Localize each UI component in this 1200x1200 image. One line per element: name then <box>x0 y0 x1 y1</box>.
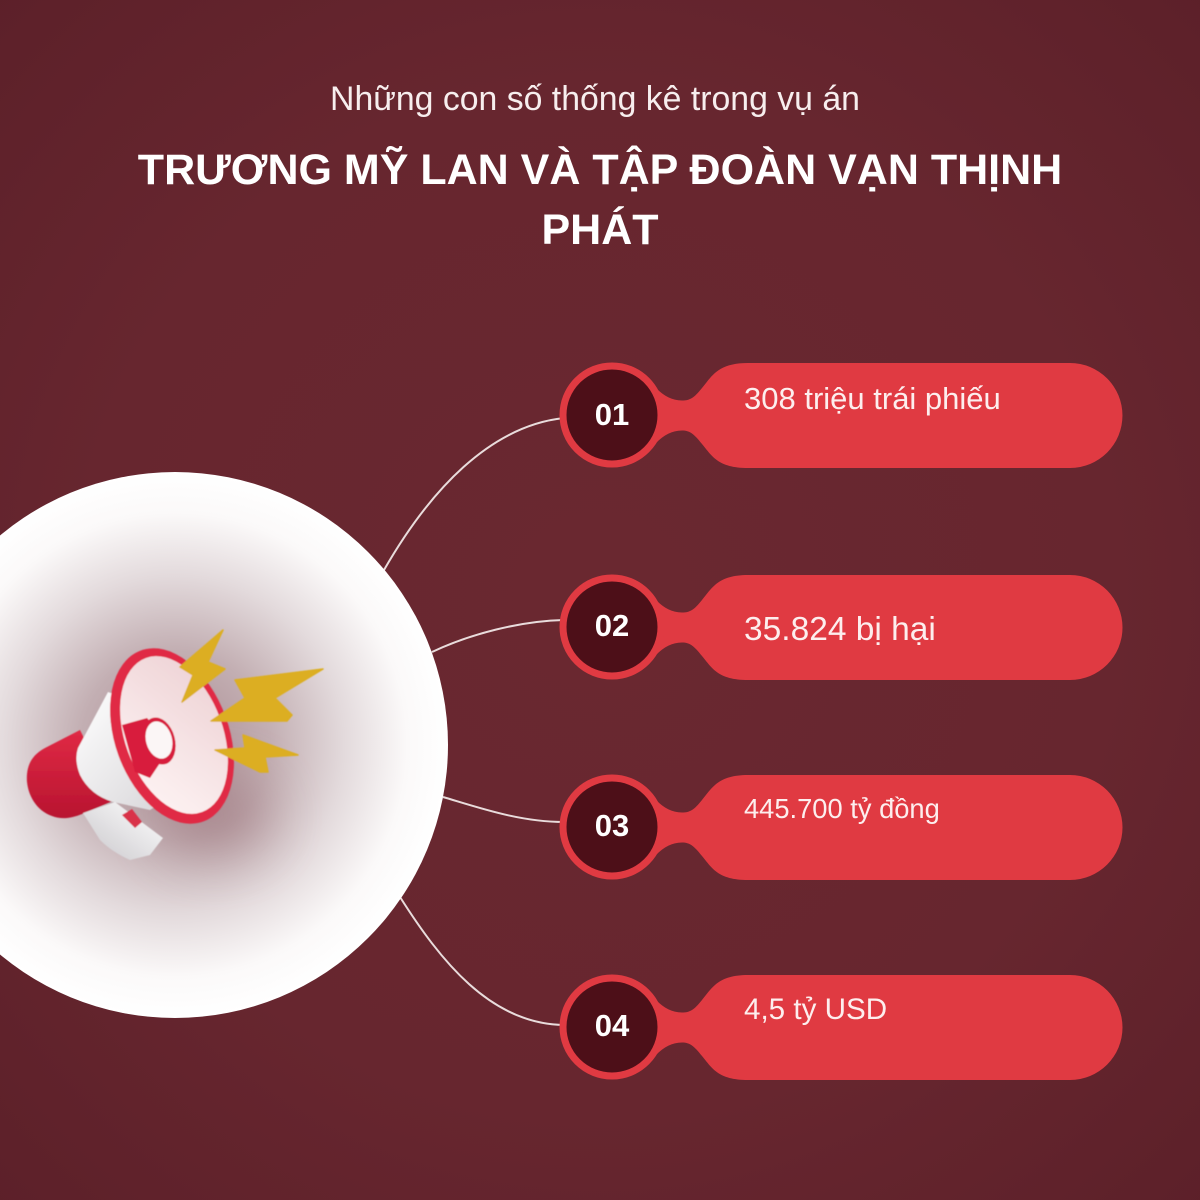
subtitle: Những con số thống kê trong vụ án <box>330 80 860 118</box>
number badge <box>563 366 661 464</box>
item 01 <box>563 363 1122 468</box>
megaphone shadow <box>160 775 270 855</box>
label: 4,5 tỷ USD <box>744 993 887 1026</box>
megaphone driver cap <box>142 718 176 762</box>
megaphone driver tube <box>122 718 172 778</box>
connector lines <box>384 418 564 1025</box>
megaphone handle <box>83 802 163 860</box>
label: 445.700 tỷ đồng <box>744 793 940 824</box>
megaphone button <box>122 809 142 828</box>
megaphone rim <box>87 631 257 841</box>
number: 02 <box>595 608 629 643</box>
label: 308 triệu trái phiếu <box>744 381 1001 416</box>
number: 03 <box>595 808 629 843</box>
number: 01 <box>595 397 629 432</box>
pill shape <box>640 575 1122 680</box>
item 02 <box>563 575 1122 680</box>
pill shape <box>640 775 1122 880</box>
icon: lightning bolt 1 <box>180 630 225 702</box>
pill shape <box>640 975 1122 1080</box>
number badge <box>563 778 661 876</box>
icon: megaphone <box>27 630 323 860</box>
megaphone cone <box>76 692 180 810</box>
megaphone driver rim <box>137 714 181 768</box>
item 04 <box>563 975 1122 1080</box>
number badge <box>563 978 661 1076</box>
title <box>138 145 1062 254</box>
icon: lightning bolt 3 <box>215 735 298 772</box>
megaphone back cylinder <box>27 730 115 818</box>
number: 04 <box>595 1008 630 1043</box>
icon: lightning bolt 2 <box>211 669 323 721</box>
megaphone inner <box>100 641 248 829</box>
title: TRƯƠNG MỸ LAN VÀ TẬP ĐOÀN VẠN THỊNH <box>138 145 1062 194</box>
pill shape <box>640 363 1122 468</box>
white disc with megaphone <box>0 472 448 1018</box>
label: 35.824 bị hại <box>744 611 936 648</box>
title: PHÁT <box>541 206 659 254</box>
item 03 <box>563 775 1122 880</box>
number badge <box>563 578 661 676</box>
